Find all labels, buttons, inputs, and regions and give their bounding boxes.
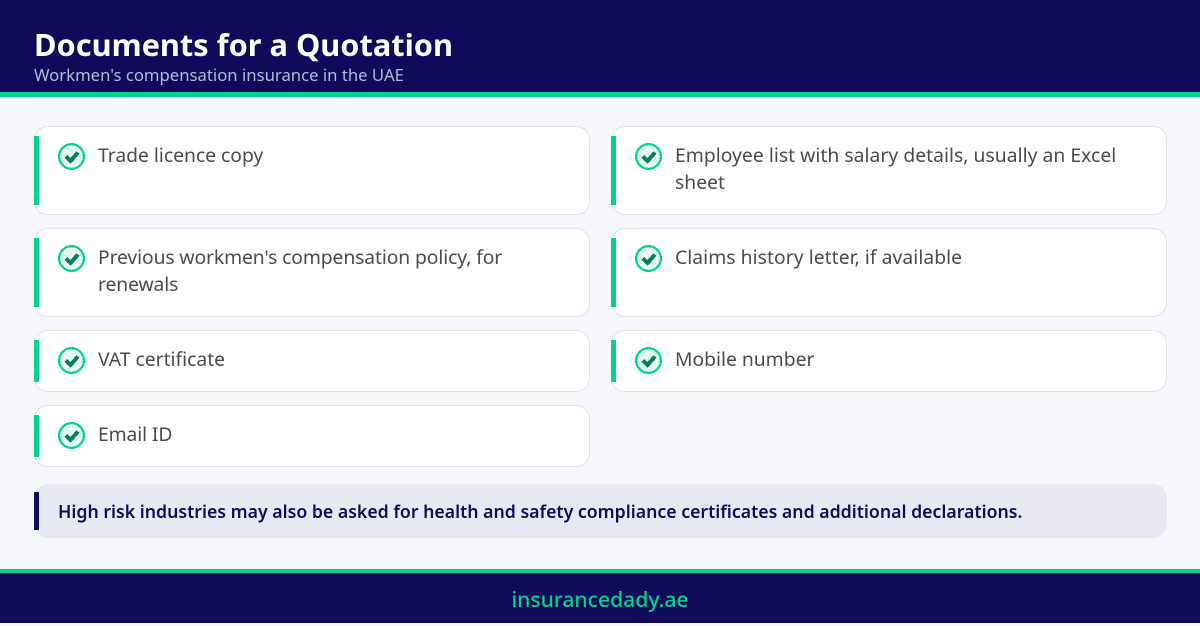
panel: trade licence copy xyxy=(34,126,590,215)
item text: Trade licence copy xyxy=(98,141,263,168)
item text: Previous workmen's compensation policy, for renewals xyxy=(98,243,502,297)
subtitle: Workmen's compensation insurance in the UAE xyxy=(34,63,404,86)
title: Documents for a Quotation xyxy=(34,24,453,66)
footer: site name: insurancedady.ae xyxy=(511,585,689,614)
item text: Mobile number xyxy=(675,345,814,372)
item text: Employee list with salary details, usually an Excel sheet xyxy=(675,141,1116,195)
icon: check xyxy=(58,347,85,374)
icon: check xyxy=(635,143,662,170)
panel: claims history xyxy=(611,228,1167,317)
item text: Email ID xyxy=(98,420,172,447)
panel: employee list xyxy=(611,126,1167,215)
item text: VAT certificate xyxy=(98,345,225,372)
panel: mobile number xyxy=(611,330,1167,392)
icon: check xyxy=(58,422,85,449)
icon: check xyxy=(635,245,662,272)
item text: Claims history letter, if available xyxy=(675,243,962,270)
icon: check xyxy=(58,143,85,170)
header band xyxy=(0,0,1200,97)
panel: email ID xyxy=(34,405,590,467)
callout: high risk note xyxy=(34,484,1167,538)
panel: previous policy xyxy=(34,228,590,317)
footer: site name xyxy=(0,569,1200,623)
icon: check xyxy=(58,245,85,272)
note text: High risk industries may also be asked for health and safety compliance certificates and additional declarations. xyxy=(58,500,1022,524)
icon: check xyxy=(635,347,662,374)
panel: VAT certificate xyxy=(34,330,590,392)
